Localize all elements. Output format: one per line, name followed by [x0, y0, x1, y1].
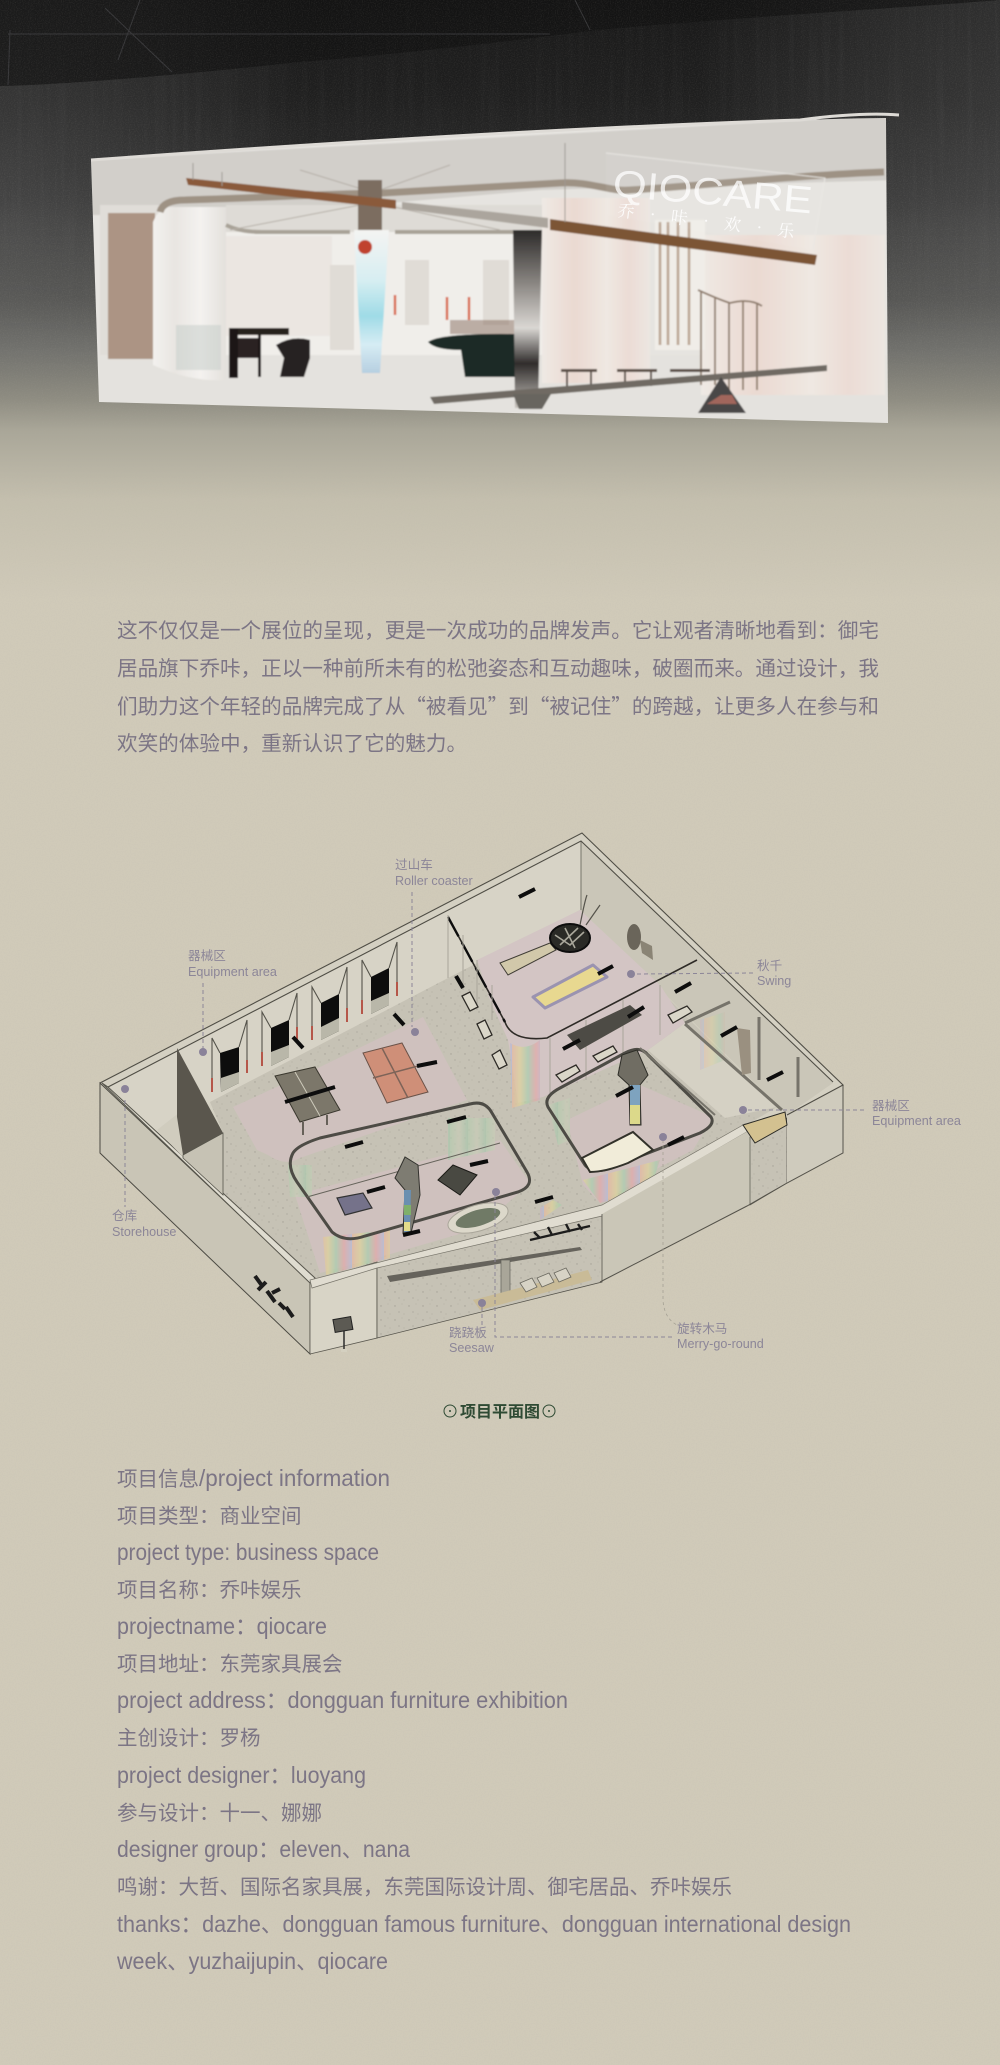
plan: terrazzo floor	[183, 910, 777, 1280]
label: seesaw: 跷跷板	[449, 1325, 487, 1340]
project information list: 鸣谢：大哲、国际名家具展，东莞国际设计周、御宅居品、乔咔娱乐	[117, 1876, 732, 1899]
hero photo of the exhibition booth	[85, 110, 905, 430]
plan: black light bars	[285, 889, 783, 1235]
plan: swing	[550, 895, 600, 952]
dark table and chairs	[229, 328, 289, 335]
intro paragraph: 居品旗下乔咔，正以一种前所未有的松弛姿态和互动趣味，破圈而来。通过设计，我	[117, 652, 879, 682]
hanging rods	[193, 143, 565, 222]
label: merry-go-round	[677, 1322, 764, 1351]
plan: table tennis table	[275, 1067, 340, 1122]
plan: pink floor, roller coaster hall	[233, 1017, 467, 1162]
project information list: project type: business space	[117, 1539, 379, 1565]
acrylic logo plate	[606, 153, 825, 250]
project information list: 项目地址：东莞家具展会	[117, 1653, 342, 1676]
door	[108, 213, 155, 359]
plan: white oval platform	[582, 1132, 653, 1172]
label: equipment area left: 器械区	[188, 949, 226, 963]
floor	[226, 356, 542, 372]
mirror pillar	[513, 230, 542, 408]
plan: pink floor, swing room	[477, 910, 685, 1103]
plan: left rim	[102, 1083, 315, 1284]
plan: right front wall	[600, 1130, 750, 1282]
left curtain	[153, 207, 226, 380]
plan: structural posts and pipes	[640, 1002, 798, 1115]
project information list: 参与设计：十一、娜娜	[117, 1802, 322, 1825]
plan: leader lines	[125, 892, 867, 1337]
benches	[561, 369, 710, 386]
label: equipment area left: Equipment area	[188, 965, 277, 979]
plan: shelf rack	[567, 1005, 642, 1050]
intro paragraph: 欢笑的体验中，重新认识了它的魅力。	[117, 726, 467, 756]
booth logo text: QIOCARE	[611, 163, 814, 222]
label: roller coaster: Roller coaster	[395, 874, 473, 888]
project information list: project designer：luoyang	[117, 1762, 366, 1788]
plan: orange table	[363, 1043, 428, 1103]
plan: curtains	[288, 1012, 725, 1275]
project information list: /project information	[199, 1465, 390, 1491]
label: seesaw: Seesaw	[449, 1341, 495, 1355]
railing	[698, 290, 762, 390]
label: equipment area left	[188, 949, 277, 979]
background: dark hall fading into beige paper	[0, 0, 1000, 558]
plan: wall lettering	[255, 1224, 590, 1317]
seesaw	[430, 365, 827, 404]
label: equipment area right: 器械区	[872, 1099, 910, 1113]
plan: room partition rail	[448, 917, 697, 1039]
plan: left outer wall	[100, 1083, 310, 1354]
label: roller coaster	[395, 858, 473, 888]
green table	[428, 334, 515, 377]
label: swing	[757, 959, 791, 988]
plan: wall displays	[212, 942, 397, 1092]
plan: roller coaster track, second loop	[547, 1049, 712, 1170]
isometric floor plan	[100, 833, 961, 1355]
project information list: 主创设计：罗杨	[117, 1727, 260, 1750]
plan: pink floor beneath the first loop	[295, 1140, 530, 1273]
LED pillar	[354, 230, 389, 373]
plan: seesaw model	[387, 1247, 592, 1310]
plan: back left wall	[108, 841, 581, 1157]
label: roller coaster: 过山车	[395, 858, 433, 872]
plan: back right wall	[580, 841, 833, 1115]
project information list: thanks：dazhe、dongguan famous furniture、dongguan international design	[117, 1911, 851, 1937]
plan: entrance panel	[750, 1118, 787, 1205]
plan: bench in swing room	[500, 943, 556, 975]
plan: front seesaw opening	[377, 1212, 602, 1338]
central column	[358, 180, 382, 230]
plan: yellow play mat	[533, 965, 607, 1008]
photo frame edge	[91, 114, 899, 160]
project information list: 项目类型：商业空间	[117, 1505, 302, 1528]
right curtains	[542, 198, 634, 382]
plan: small signboard	[333, 1317, 353, 1352]
plan: round wall art	[627, 924, 653, 960]
plan: low table in loop	[337, 1193, 372, 1215]
plan: LED totem, first loop	[395, 1157, 420, 1233]
project information list: 项目名称：乔咔娱乐	[117, 1579, 302, 1602]
booth logo text: 乔 · 咔 · 欢 · 乐	[616, 196, 797, 243]
project information list: projectname：qiocare	[117, 1613, 327, 1639]
plan: pink floor beneath the second loop	[567, 1085, 713, 1203]
label: swing: 秋千	[757, 959, 782, 973]
label: seesaw	[449, 1325, 495, 1355]
intro paragraph: 这不仅仅是一个展位的呈现，更是一次成功的品牌发声。它让观者清晰地看到：御宅	[117, 614, 879, 644]
plan: top rim lines	[100, 833, 843, 1115]
plan: oval gaming table	[445, 1197, 511, 1239]
intro paragraph: 们助力这个年轻的品牌完成了从“被看见”到“被记住”的跨越，让更多人在参与和	[117, 690, 879, 720]
label: swing: Swing	[757, 974, 791, 988]
label: merry-go-round: 旋转木马	[677, 1322, 727, 1336]
plan: dark table in loop	[438, 1165, 477, 1195]
plan caption: 项目平面图	[460, 1398, 540, 1422]
label: merry-go-round: Merry-go-round	[677, 1337, 764, 1351]
project information list: designer group：eleven、nana	[117, 1836, 410, 1862]
plan: wall trays	[462, 992, 692, 1082]
plan: yellow entrance beam	[743, 1112, 787, 1143]
plan: front corner wall	[310, 1262, 377, 1354]
ceiling and fascia	[91, 115, 899, 215]
plan: storehouse	[157, 1112, 205, 1157]
posters on the back wall	[330, 260, 509, 350]
plan: dark partition	[177, 1048, 223, 1155]
label: equipment area right	[872, 1099, 961, 1128]
intro paragraph	[117, 614, 879, 756]
label: equipment area right: Equipment area	[872, 1114, 961, 1128]
plan: silhouette	[100, 833, 843, 1354]
project information list: 项目信息	[117, 1468, 199, 1491]
project information list: week、yuzhaijupin、qiocare	[116, 1948, 388, 1974]
rail	[160, 172, 884, 212]
plan: front rim	[310, 1125, 750, 1288]
plan: location dots	[121, 970, 747, 1307]
plan: right end wall	[787, 1085, 843, 1183]
label: storehouse: Storehouse	[112, 1225, 176, 1239]
plan: LED totem, second loop	[618, 1050, 648, 1125]
plan: right pale floor	[648, 1023, 777, 1118]
booth logo text	[615, 171, 811, 238]
wooden beam	[186, 178, 396, 209]
project information list	[116, 1465, 851, 1974]
plan: figure display	[737, 1028, 751, 1075]
label: storehouse	[112, 1208, 176, 1239]
label: storehouse: 仓库	[112, 1208, 137, 1223]
project information list: project address：dongguan furniture exhibition	[117, 1687, 568, 1713]
plan: roller coaster track, first loop	[290, 1103, 530, 1239]
